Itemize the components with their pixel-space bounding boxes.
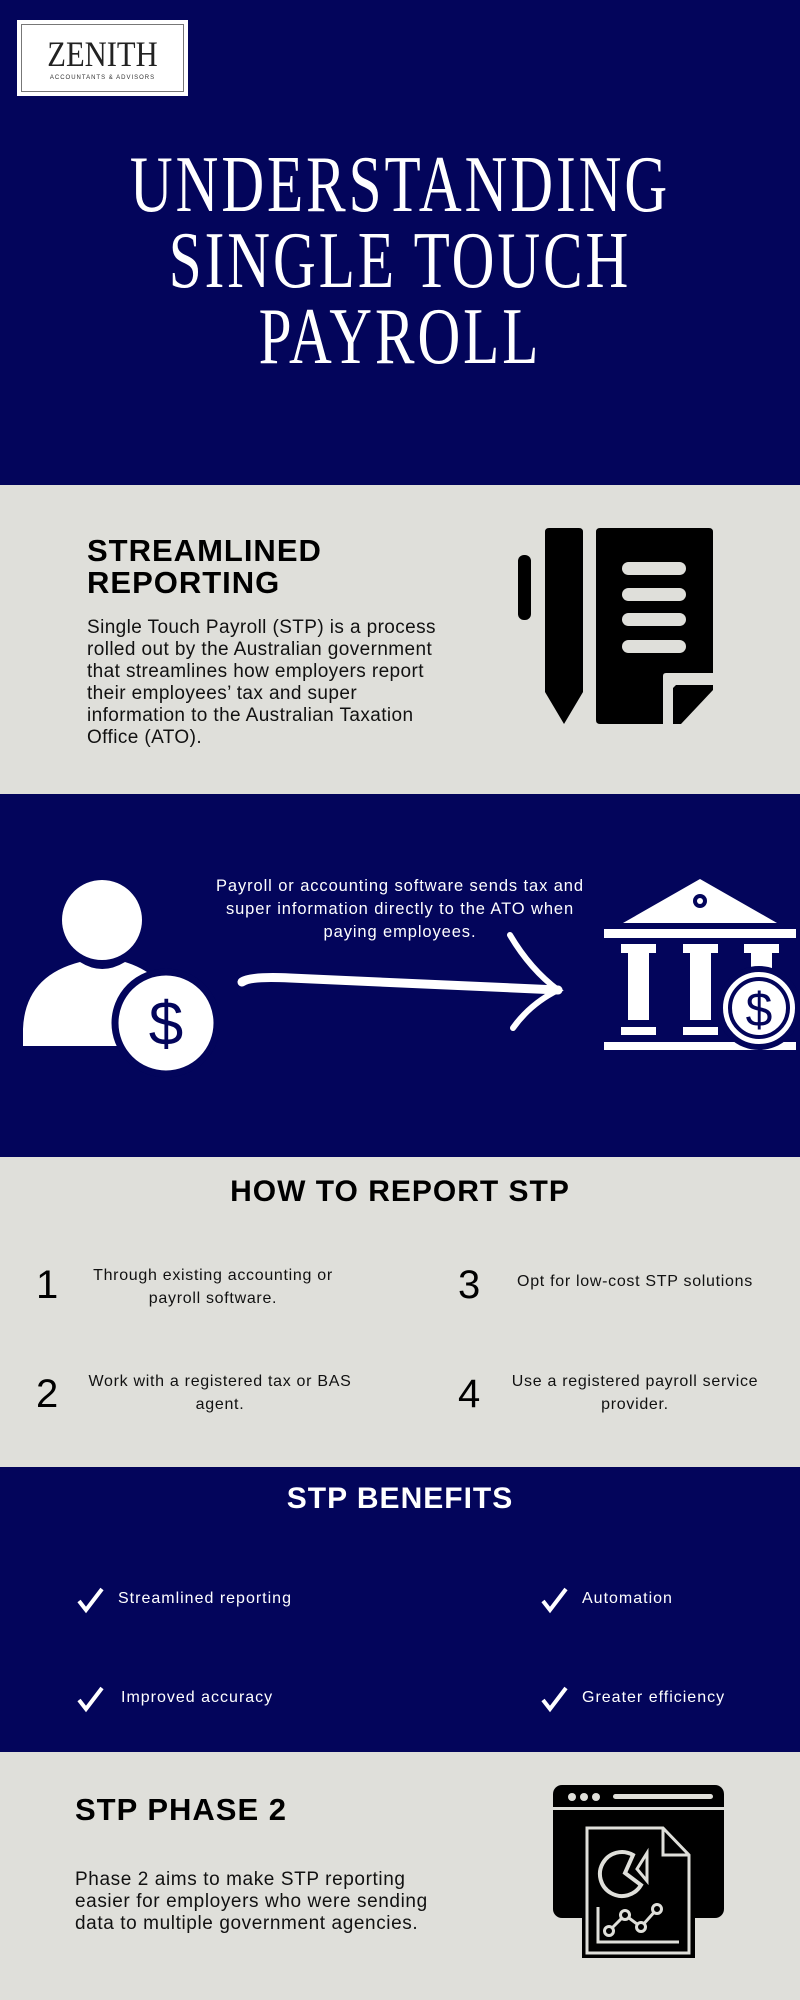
arrow <box>238 932 564 1031</box>
title: PAYROLL <box>259 293 541 381</box>
panel: phase 2 <box>0 1752 800 2000</box>
logo: ACCOUNTANTS & ADVISORS <box>50 75 155 81</box>
item 3: 3 <box>458 1263 480 1307</box>
benefit 2: Automation <box>582 1590 673 1607</box>
heading: HOW TO REPORT STP <box>230 1175 570 1208</box>
heading <box>87 533 322 600</box>
text block: flow description <box>216 877 584 941</box>
text block: flow description: super information directly to the ATO when <box>226 900 574 918</box>
benefit 4 <box>542 1686 725 1712</box>
benefit 2 <box>542 1588 673 1614</box>
icon: report window <box>553 1785 724 1958</box>
logo <box>17 20 188 96</box>
title <box>130 141 670 381</box>
header panel <box>0 0 800 485</box>
benefit 1 <box>78 1588 292 1614</box>
panel: streamlined reporting <box>0 485 800 794</box>
item 4: Use a registered payroll service provider. <box>512 1373 758 1413</box>
heading: STP BENEFITS <box>287 1482 513 1515</box>
icon: bank with coin: $ <box>746 984 772 1037</box>
item 4: 4 <box>458 1372 480 1416</box>
text block: Single Touch Payroll (STP) is a process rolled out by the Australian government that streamlines how employers report their employees’ tax and super information to the Australian Taxation Office (ATO). <box>87 617 436 748</box>
benefit 3: Improved accuracy <box>121 1689 273 1706</box>
item 3 <box>458 1263 753 1307</box>
panel: flow <box>0 794 800 1157</box>
panel: how to report <box>0 1157 800 1467</box>
benefit 3 <box>78 1686 273 1712</box>
heading: STREAMLINED <box>87 533 322 568</box>
heading: STP PHASE 2 <box>75 1792 287 1827</box>
item 1: 1 <box>36 1263 58 1307</box>
text block: Phase 2 aims to make STP reporting easier for employers who were sending data to multiple government agencies. <box>75 1869 428 1934</box>
heading: REPORTING <box>87 565 280 600</box>
icon: bank with coin <box>604 879 796 1050</box>
item 1: Through existing accounting or payroll software. <box>93 1267 333 1307</box>
icon: person with coin: $ <box>149 990 183 1059</box>
title: SINGLE TOUCH <box>169 217 631 305</box>
logo: ZENITH <box>47 34 158 74</box>
item 3: Opt for low-cost STP solutions <box>517 1273 753 1290</box>
benefit 4: Greater efficiency <box>582 1689 725 1706</box>
icon: pen and document <box>518 528 713 724</box>
icon: person with coin <box>23 880 214 1070</box>
benefit 1: Streamlined reporting <box>118 1590 292 1607</box>
item 2: 2 <box>36 1372 58 1416</box>
title: UNDERSTANDING <box>130 141 670 229</box>
panel: benefits <box>0 1467 800 1752</box>
item 2: Work with a registered tax or BAS agent. <box>89 1373 351 1413</box>
text block: flow description: paying employees. <box>324 923 476 941</box>
text block: flow description: Payroll or accounting software sends tax and <box>216 877 584 895</box>
